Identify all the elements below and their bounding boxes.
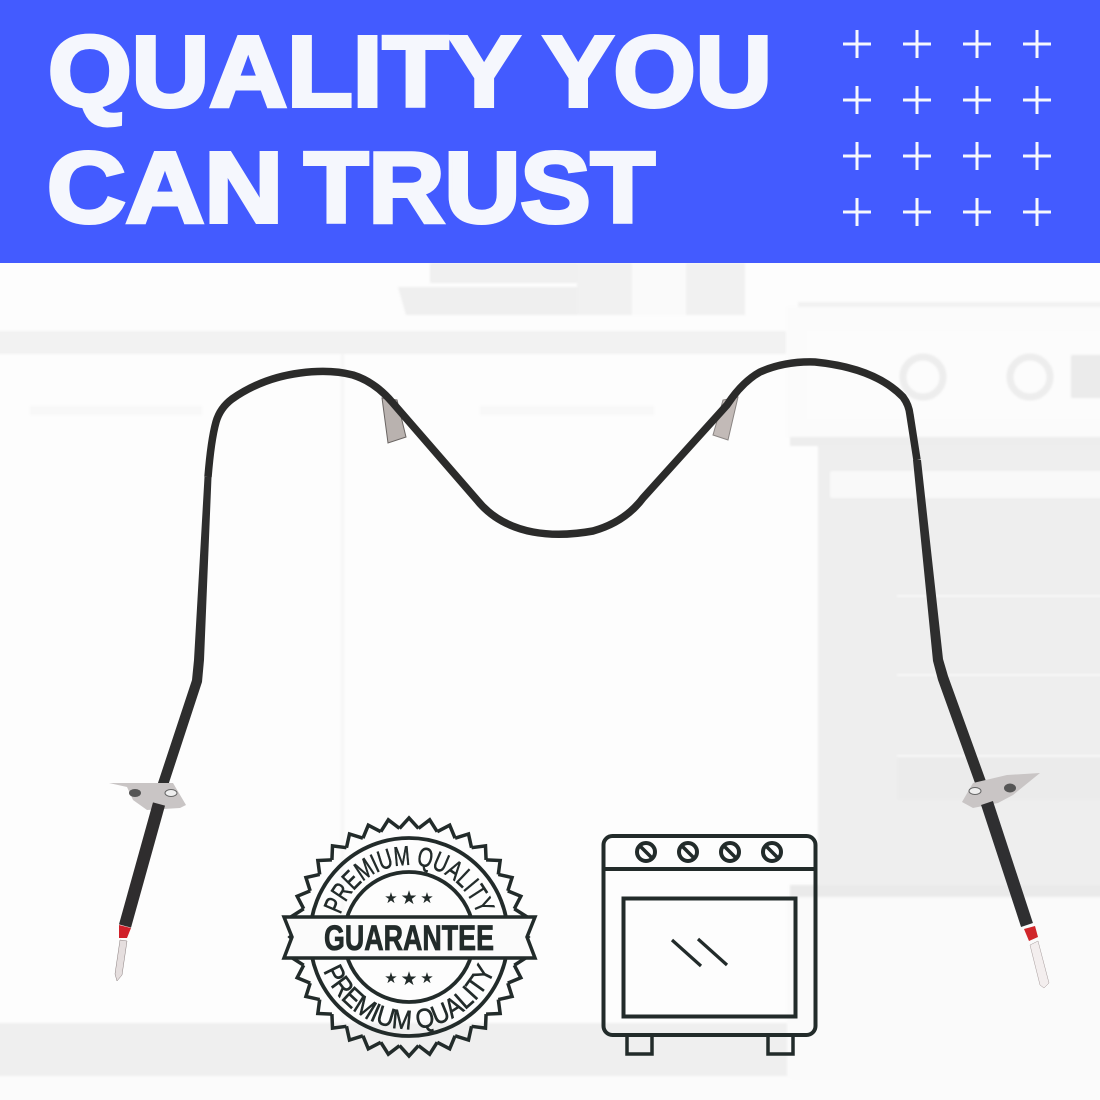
red insulator right bbox=[1024, 926, 1038, 941]
lower right tube bbox=[987, 803, 1027, 925]
glass reflection bbox=[672, 939, 727, 966]
stars bottom: ★ bbox=[420, 969, 434, 987]
header banner bbox=[0, 0, 1100, 263]
left flange bbox=[109, 783, 186, 810]
stars top bbox=[384, 887, 434, 909]
title: CAN bbox=[47, 132, 283, 244]
lower left tube bbox=[125, 804, 159, 926]
oven window bbox=[624, 898, 796, 1016]
title: TRUST bbox=[304, 132, 655, 244]
icon: oven bbox=[604, 836, 816, 1054]
stars top: ★ bbox=[384, 889, 398, 907]
red insulator left bbox=[119, 925, 131, 938]
serrated edge bbox=[290, 818, 528, 1056]
decorative plus grid bbox=[843, 30, 1051, 226]
tapered right leg bbox=[913, 460, 991, 797]
title: QUALITY bbox=[48, 16, 520, 128]
top arc text: PREMIUM QUALITY bbox=[324, 846, 496, 914]
terminal lug left bbox=[115, 940, 127, 981]
mounting clip right bbox=[713, 397, 738, 440]
stars top: ★ bbox=[400, 887, 418, 909]
badge: premium quality guarantee seal bbox=[282, 816, 538, 1058]
tapered left leg bbox=[153, 477, 212, 801]
heating tube bbox=[208, 362, 917, 534]
title bbox=[47, 16, 772, 244]
right flange bbox=[962, 773, 1040, 808]
knobs bbox=[637, 843, 781, 861]
stars bottom: ★ bbox=[400, 968, 418, 990]
mounting clip left bbox=[382, 398, 406, 443]
oven heating element bbox=[109, 362, 1049, 988]
title: YOU bbox=[543, 16, 772, 128]
stars top: ★ bbox=[420, 889, 434, 907]
bottom arc text: PREMIUM QUALITY bbox=[324, 962, 492, 1032]
rings bbox=[310, 838, 508, 1036]
ribbon bbox=[284, 917, 535, 958]
oven body bbox=[604, 836, 816, 1035]
stars bottom bbox=[384, 968, 434, 990]
terminal lug right bbox=[1030, 941, 1049, 988]
control panel divider bbox=[604, 867, 815, 871]
guarantee text: GUARANTEE bbox=[324, 919, 494, 958]
oven feet bbox=[627, 1036, 793, 1054]
stars bottom: ★ bbox=[384, 969, 398, 987]
